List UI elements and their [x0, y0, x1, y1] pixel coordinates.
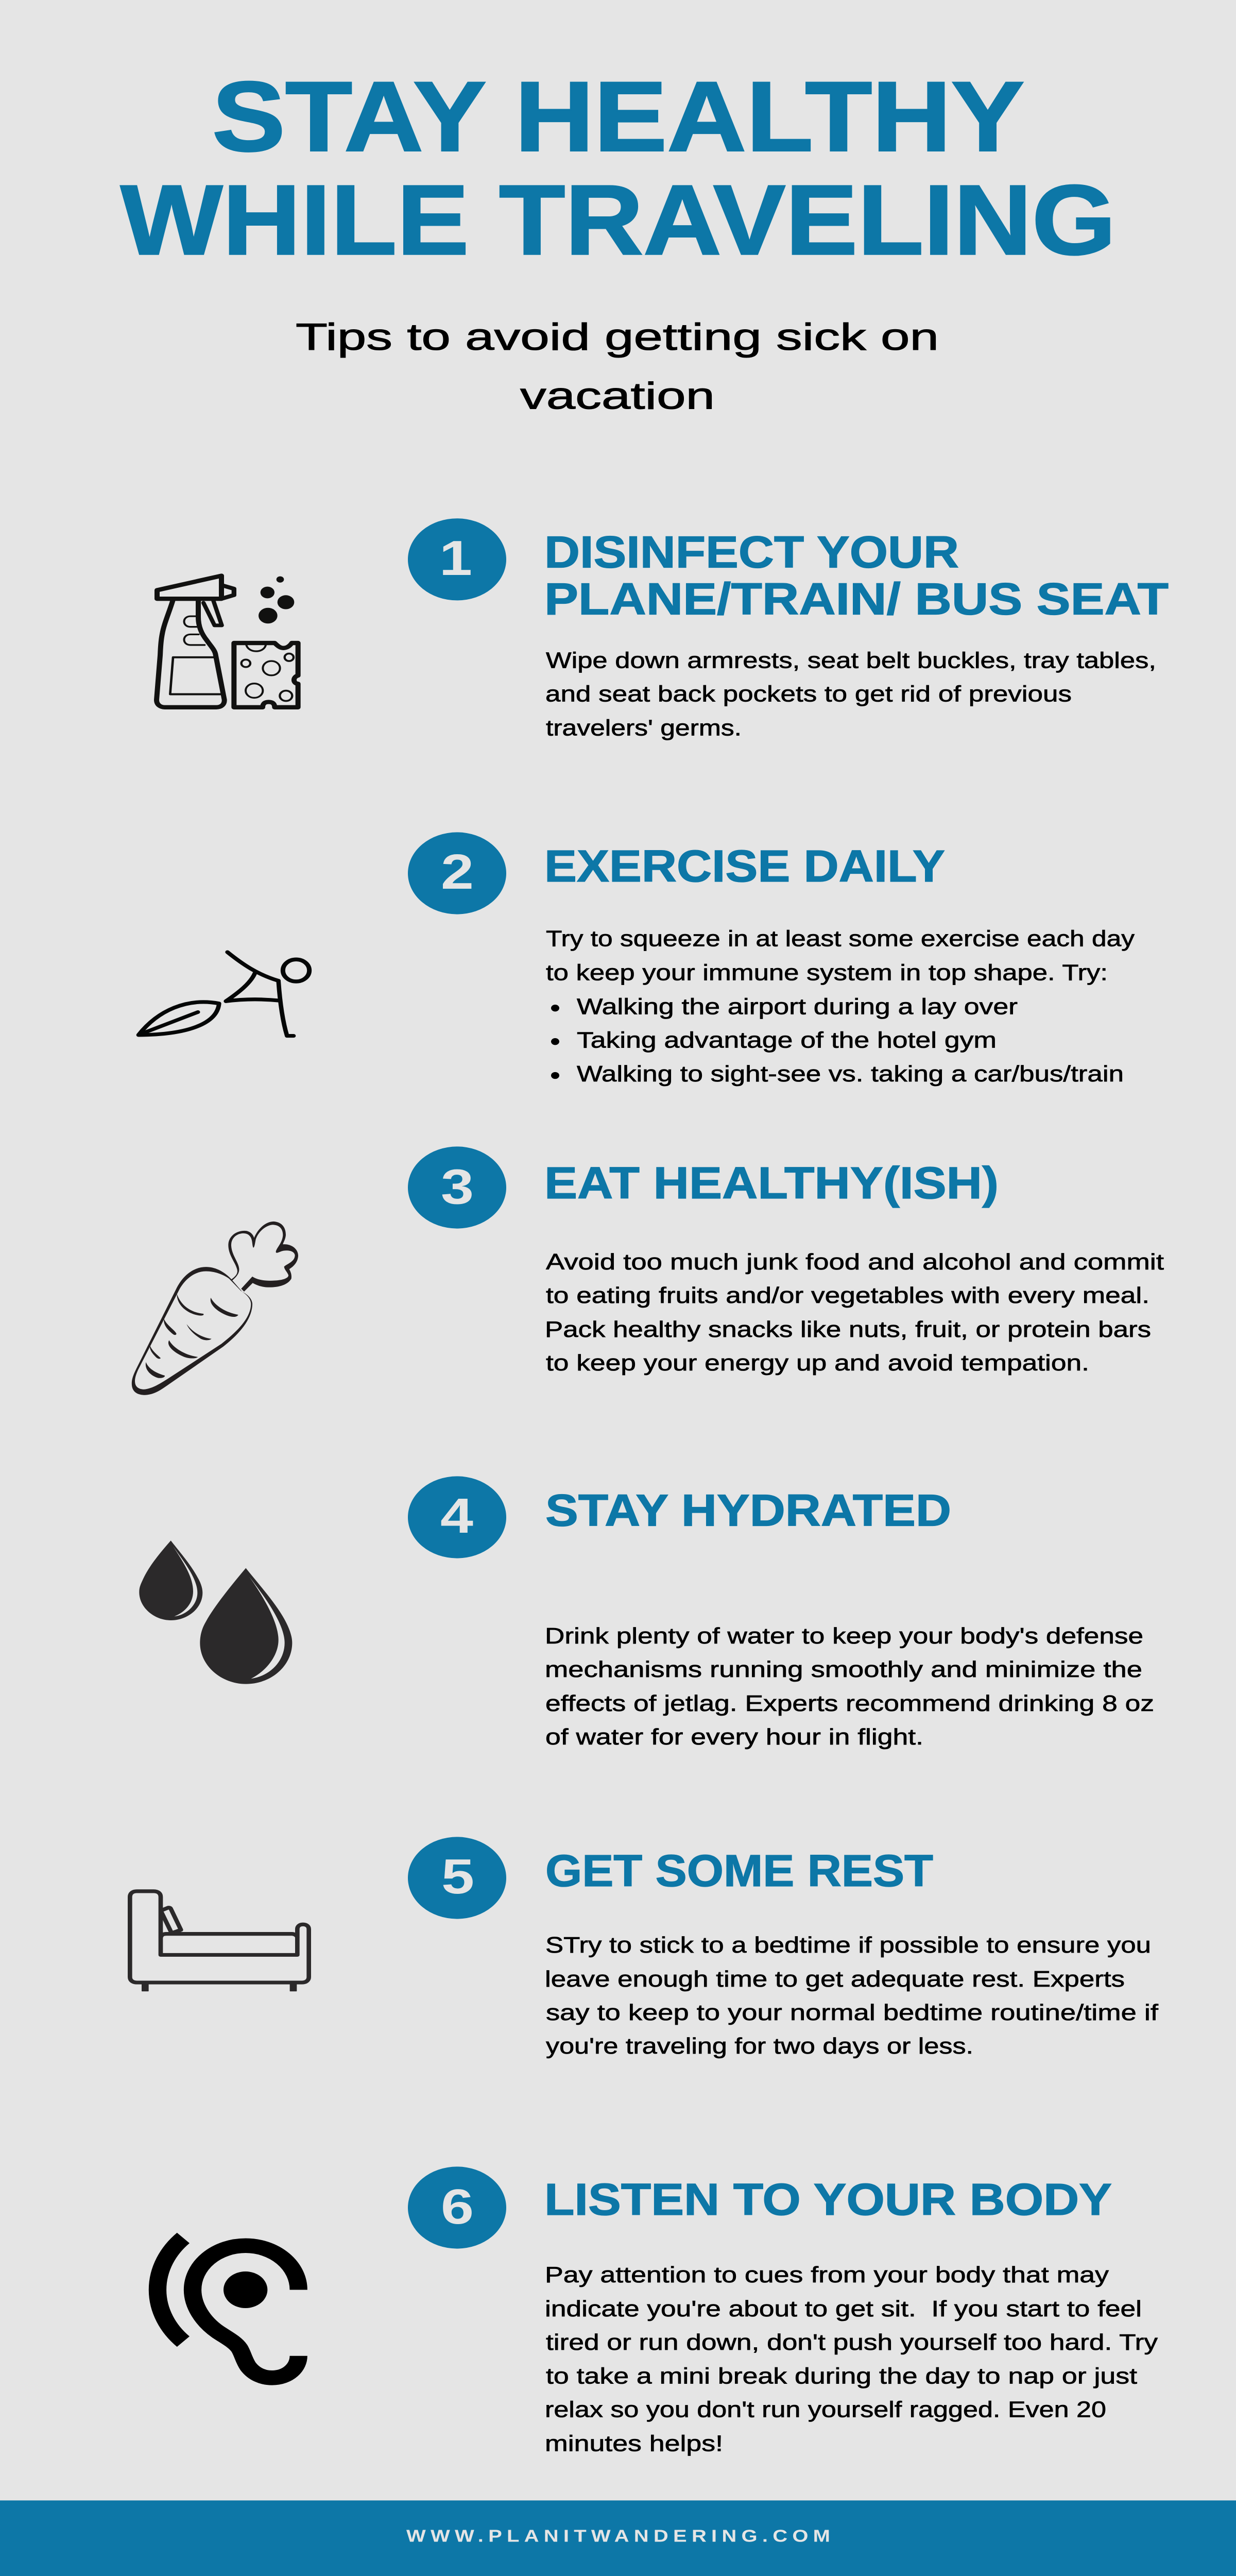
number badge 1: 1 [439, 531, 472, 586]
subtitle: vacation [520, 375, 715, 417]
body text 6: to take a mini break during the day to nap or just [546, 2364, 1137, 2389]
body text 3: Avoid too much junk food and alcohol and commit [546, 1250, 1164, 1275]
body text 3: to keep your energy up and avoid tempation. [546, 1351, 1089, 1376]
subtitle: Tips to avoid getting sick on [296, 316, 939, 358]
heading 2: EXERCISE DAILY [544, 841, 945, 891]
body text 6: minutes helps! [545, 2431, 723, 2456]
heading 5: GET SOME REST [545, 1846, 933, 1896]
heading 1: DISINFECT YOUR [544, 528, 959, 578]
footer bar [0, 2500, 1236, 2576]
body text 2: Walking to sight-see vs. taking a car/bus/train [577, 1062, 1124, 1087]
body text 6: relax so you don't run yourself ragged. Even 20 [545, 2398, 1106, 2422]
panel: tip 1 disinfect [157, 518, 1169, 740]
number badge 3: 3 [441, 1160, 474, 1214]
body text 4: Drink plenty of water to keep your body's defense [545, 1624, 1143, 1649]
body text 4 [545, 1624, 1154, 1750]
number badge 2 [408, 832, 506, 914]
panel: tip 2 exercise [139, 832, 1135, 1087]
number badge 3 [408, 1146, 506, 1229]
number badge 5: 5 [441, 1849, 474, 1904]
body text 3: to eating fruits and/or vegetables with every meal. [546, 1283, 1149, 1308]
number badge 6: 6 [441, 2179, 474, 2234]
body text 1: and seat back pockets to get rid of previous [545, 682, 1072, 707]
body text 1: Wipe down armrests, seat belt buckles, tray tables, [546, 649, 1156, 673]
icon: carrot [132, 1222, 298, 1395]
body text 5: you're traveling for two days or less. [546, 2034, 973, 2059]
icon: water drops [139, 1540, 292, 1684]
panel: tip 6 listen [158, 2166, 1158, 2456]
footer bar: WWW.PLANITWANDERING.COM [406, 2526, 830, 2546]
body text 6 [545, 2263, 1158, 2456]
title [121, 62, 1116, 276]
icon: ear [158, 2238, 299, 2378]
number badge 2: 2 [441, 844, 474, 900]
body text 2: Walking the airport during a lay over [577, 994, 1018, 1019]
body text 3 [545, 1250, 1164, 1376]
title: STAY HEALTHY [212, 62, 1024, 172]
icon: spray bottle and sponge [157, 575, 298, 707]
body text 4: mechanisms running smoothly and minimize the [545, 1657, 1142, 1682]
subtitle [296, 316, 939, 417]
icon: bed [130, 1891, 309, 1991]
body text 5: say to keep to your normal bedtime routine/time if [546, 2001, 1159, 2025]
number badge 1 [408, 518, 506, 600]
panel: tip 5 rest [130, 1837, 1159, 2059]
heading 1: PLANE/TRAIN/ BUS SEAT [544, 574, 1169, 624]
heading 3: EAT HEALTHY(ISH) [544, 1158, 999, 1208]
heading 6: LISTEN TO YOUR BODY [544, 2175, 1112, 2225]
panel: tip 4 hydrate [139, 1476, 1154, 1750]
body text 4: of water for every hour in flight. [545, 1725, 923, 1750]
body text 2 [546, 927, 1135, 1087]
body text 5: STry to stick to a bedtime if possible to ensure you [545, 1933, 1151, 1958]
body text 5 [545, 1933, 1159, 2059]
panel: tip 3 eat healthy [132, 1146, 1164, 1395]
body text 1 [545, 649, 1156, 740]
body text 2: Taking advantage of the hotel gym [577, 1028, 997, 1053]
number badge 4 [408, 1476, 506, 1558]
heading 1 [544, 528, 1169, 624]
body text 6: indicate you're about to get sit. If you start to feel [545, 2297, 1142, 2321]
body text 1: travelers' germs. [546, 716, 742, 740]
body text 5: leave enough time to get adequate rest. Experts [545, 1967, 1125, 1992]
body text 2: to keep your immune system in top shape. Try: [546, 960, 1108, 985]
number badge 6 [408, 2166, 506, 2249]
body text 4: effects of jetlag. Experts recommend drinking 8 oz [545, 1691, 1154, 1716]
body text 2: Try to squeeze in at least some exercise each day [546, 927, 1135, 952]
heading 4: STAY HYDRATED [545, 1486, 951, 1536]
title: WHILE TRAVELING [121, 165, 1116, 276]
body text 3: Pack healthy snacks like nuts, fruit, or protein bars [545, 1317, 1151, 1342]
number badge 4: 4 [440, 1488, 473, 1544]
icon: person stretching [139, 952, 310, 1036]
body text 6: Pay attention to cues from your body that may [545, 2263, 1109, 2287]
body text 6: tired or run down, don't push yourself too hard. Try [546, 2330, 1158, 2355]
number badge 5 [408, 1837, 506, 1919]
